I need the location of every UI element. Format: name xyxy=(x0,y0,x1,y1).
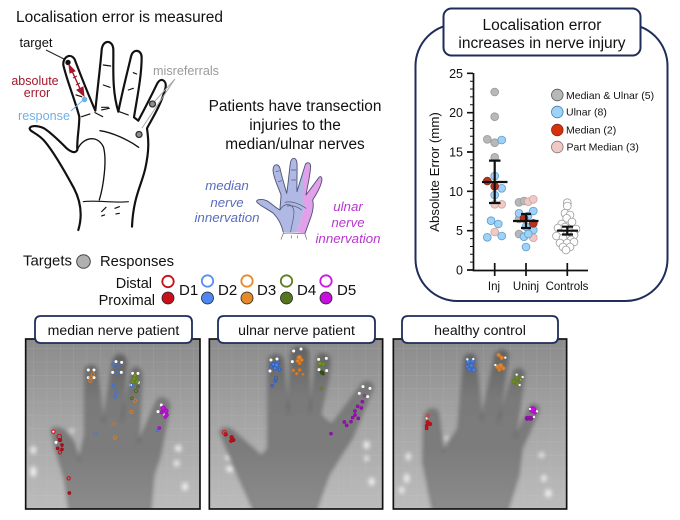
label: median nerve innervation: nerve xyxy=(210,195,244,210)
means and error bars xyxy=(482,161,578,234)
absolute error arrow xyxy=(69,65,84,96)
panel: median nerve patient photo xyxy=(26,339,200,512)
panel: localisation error chart xyxy=(416,8,668,301)
panel heading box: increases in nerve injury xyxy=(458,35,626,52)
label box: ulnar nerve patient xyxy=(218,316,375,343)
legend: digit colours: D2 xyxy=(218,282,237,299)
target pointer and dot xyxy=(46,50,71,65)
diagram: line-drawn hand with error annotation xyxy=(30,42,175,230)
label: median nerve innervation: median xyxy=(205,178,249,193)
y axis tick labels: 20 xyxy=(449,106,463,120)
legend: targets and responses: Targets xyxy=(23,254,72,270)
label: absolute error: absolute xyxy=(11,74,59,88)
uninjured data points xyxy=(515,195,537,251)
panel outline xyxy=(416,24,668,301)
response markers xyxy=(425,353,538,430)
x axis tick labels: Uninj xyxy=(513,281,539,293)
legend: targets and responses: Responses xyxy=(100,254,174,270)
y axis label: Absolute Error (mm) xyxy=(427,112,442,232)
y axis tick labels: 10 xyxy=(449,185,463,199)
ulnar innervation area xyxy=(297,163,322,233)
label box: median nerve patient xyxy=(35,316,192,343)
y axis tick labels: 5 xyxy=(456,224,463,238)
legend: digit colours: Proximal xyxy=(99,293,155,309)
label box: healthy control: healthy control xyxy=(434,322,526,338)
control data points xyxy=(553,199,580,254)
median innervation area xyxy=(257,158,307,232)
chart legend: Ulnar (8) xyxy=(566,106,607,118)
photo with hand xyxy=(209,339,383,512)
title: localisation error is measured: Localisation error is measured xyxy=(16,9,223,26)
legend: digit colours: D3 xyxy=(257,282,276,299)
chart legend: Median & Ulnar (5) xyxy=(566,90,654,102)
photo with hand xyxy=(393,339,567,512)
response dot and pointer xyxy=(71,97,87,111)
legend: digit colours: Distal xyxy=(116,276,152,292)
photo with hand xyxy=(26,339,200,512)
x axis tick labels: Controls xyxy=(546,281,589,293)
y axis tick labels: 0 xyxy=(456,264,463,278)
response markers xyxy=(222,347,371,442)
panel: ulnar nerve patient photo xyxy=(209,339,383,512)
legend: digit colours: D4 xyxy=(297,282,316,299)
label box: median nerve patient: median nerve patient xyxy=(48,322,179,338)
label: target: target xyxy=(20,36,53,50)
legend: digit colours: D1 xyxy=(179,282,198,299)
x axis tick labels: Inj xyxy=(488,281,500,293)
diagram: small hand with nerve innervation xyxy=(257,158,322,239)
chart legend: Median (2) xyxy=(566,124,616,136)
label: misreferrals: misreferrals xyxy=(153,63,219,78)
legend: digit colours: D5 xyxy=(337,282,356,299)
hand outline xyxy=(30,42,166,230)
legend: targets and responses xyxy=(23,254,174,270)
y axis tick labels: 25 xyxy=(449,67,463,81)
misreferral pointers xyxy=(142,79,175,128)
chart legend: Part Median (3) xyxy=(566,142,639,154)
y axis tick labels: 15 xyxy=(449,146,463,160)
response markers xyxy=(52,360,168,494)
chart legend xyxy=(552,89,654,154)
label: ulnar nerve innervation: nerve xyxy=(331,215,365,230)
hand outline xyxy=(257,158,322,239)
label: ulnar nerve innervation: innervation xyxy=(315,231,381,246)
label: response: response xyxy=(18,108,70,123)
label: ulnar nerve innervation: ulnar xyxy=(333,199,363,214)
heading: patients have transection injuries: median/ulnar nerves xyxy=(225,136,365,153)
label: median nerve innervation: innervation xyxy=(194,210,260,225)
panel: healthy control photo xyxy=(393,339,567,512)
label box: ulnar nerve patient: ulnar nerve patient xyxy=(238,322,355,338)
heading: patients have transection injuries: Patients have transection xyxy=(209,98,381,115)
panel heading box: Localisation error xyxy=(483,17,601,34)
heading: patients have transection injuries: injuries to the xyxy=(249,117,341,134)
label: absolute error: error xyxy=(24,86,50,100)
injured data points xyxy=(483,88,506,241)
misreferral markers xyxy=(136,101,156,138)
panel heading box xyxy=(444,8,640,56)
label box: healthy control xyxy=(402,316,558,343)
legend: digit colours xyxy=(99,275,356,309)
axes xyxy=(467,73,588,276)
